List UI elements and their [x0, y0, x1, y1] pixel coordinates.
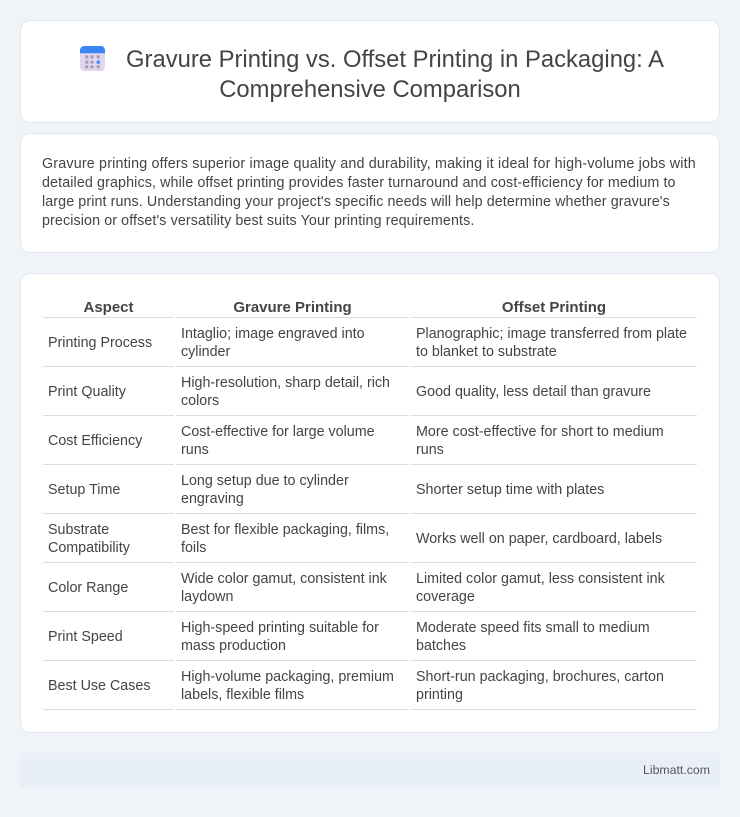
comparison table: Cost Efficiency [48, 433, 142, 449]
intro text: detailed graphics, while offset printing provides faster turnaround and cost-efficiency for medium to [42, 175, 676, 191]
comparison table: High-resolution, sharp detail, rich [181, 375, 390, 391]
title [126, 46, 664, 103]
comparison table panel [20, 273, 720, 733]
header panel [20, 20, 720, 123]
comparison table: Shorter setup time with plates [416, 482, 604, 498]
intro text: precision or offset's versatility best suits Your printing requirements. [42, 213, 474, 229]
comparison table: coverage [416, 589, 475, 605]
comparison table: colors [181, 393, 219, 409]
comparison table: Works well on paper, cardboard, labels [416, 531, 662, 547]
comparison table: cylinder [181, 344, 230, 360]
comparison table: batches [416, 638, 466, 654]
comparison table: mass production [181, 638, 286, 654]
comparison table: Cost-effective for large volume [181, 424, 375, 440]
intro panel [20, 133, 720, 253]
comparison table: Good quality, less detail than gravure [416, 384, 651, 400]
comparison table: Moderate speed fits small to medium [416, 620, 650, 636]
comparison table: Substrate [48, 522, 109, 538]
icon: calendar [80, 46, 105, 71]
comparison table: to blanket to substrate [416, 344, 557, 360]
comparison table: Print Quality [48, 384, 126, 400]
comparison table: foils [181, 540, 206, 556]
comparison table: Print Speed [48, 629, 123, 645]
comparison table: Color Range [48, 580, 128, 596]
comparison table: Best Use Cases [48, 678, 151, 694]
comparison table: Long setup due to cylinder [181, 473, 349, 489]
comparison table: Gravure Printing [233, 298, 352, 316]
footer bar [20, 753, 720, 787]
title: Gravure Printing vs. Offset Printing in Packaging: A [126, 46, 664, 73]
comparison table: High-volume packaging, premium [181, 669, 394, 685]
intro text: Gravure printing offers superior image quality and durability, making it ideal for high-volume jobs with [42, 156, 696, 172]
comparison table: Aspect [83, 298, 134, 316]
comparison table: Setup Time [48, 482, 120, 498]
comparison table: More cost-effective for short to medium [416, 424, 664, 440]
title: Comprehensive Comparison [219, 76, 521, 103]
comparison table: printing [416, 687, 463, 703]
comparison table: Limited color gamut, less consistent ink [416, 571, 665, 587]
intro text [42, 156, 696, 229]
comparison table: Wide color gamut, consistent ink [181, 571, 387, 587]
comparison table: Offset Printing [502, 298, 606, 316]
comparison table: labels, flexible films [181, 687, 304, 703]
comparison table: Compatibility [48, 540, 130, 556]
comparison table: runs [181, 442, 209, 458]
comparison table: engraving [181, 491, 244, 507]
comparison table: Best for flexible packaging, films, [181, 522, 389, 538]
comparison table: Intaglio; image engraved into [181, 326, 365, 342]
comparison table [43, 298, 697, 710]
comparison table: Planographic; image transferred from plate [416, 326, 687, 342]
comparison table: Printing Process [48, 335, 152, 351]
comparison table: High-speed printing suitable for [181, 620, 379, 636]
comparison table: laydown [181, 589, 233, 605]
footer text: Libmatt.com [643, 763, 710, 777]
comparison table: Short-run packaging, brochures, carton [416, 669, 664, 685]
comparison table: runs [416, 442, 444, 458]
intro text: large print runs. Understanding your project's specific needs will help determine whether gravure's [42, 194, 670, 210]
